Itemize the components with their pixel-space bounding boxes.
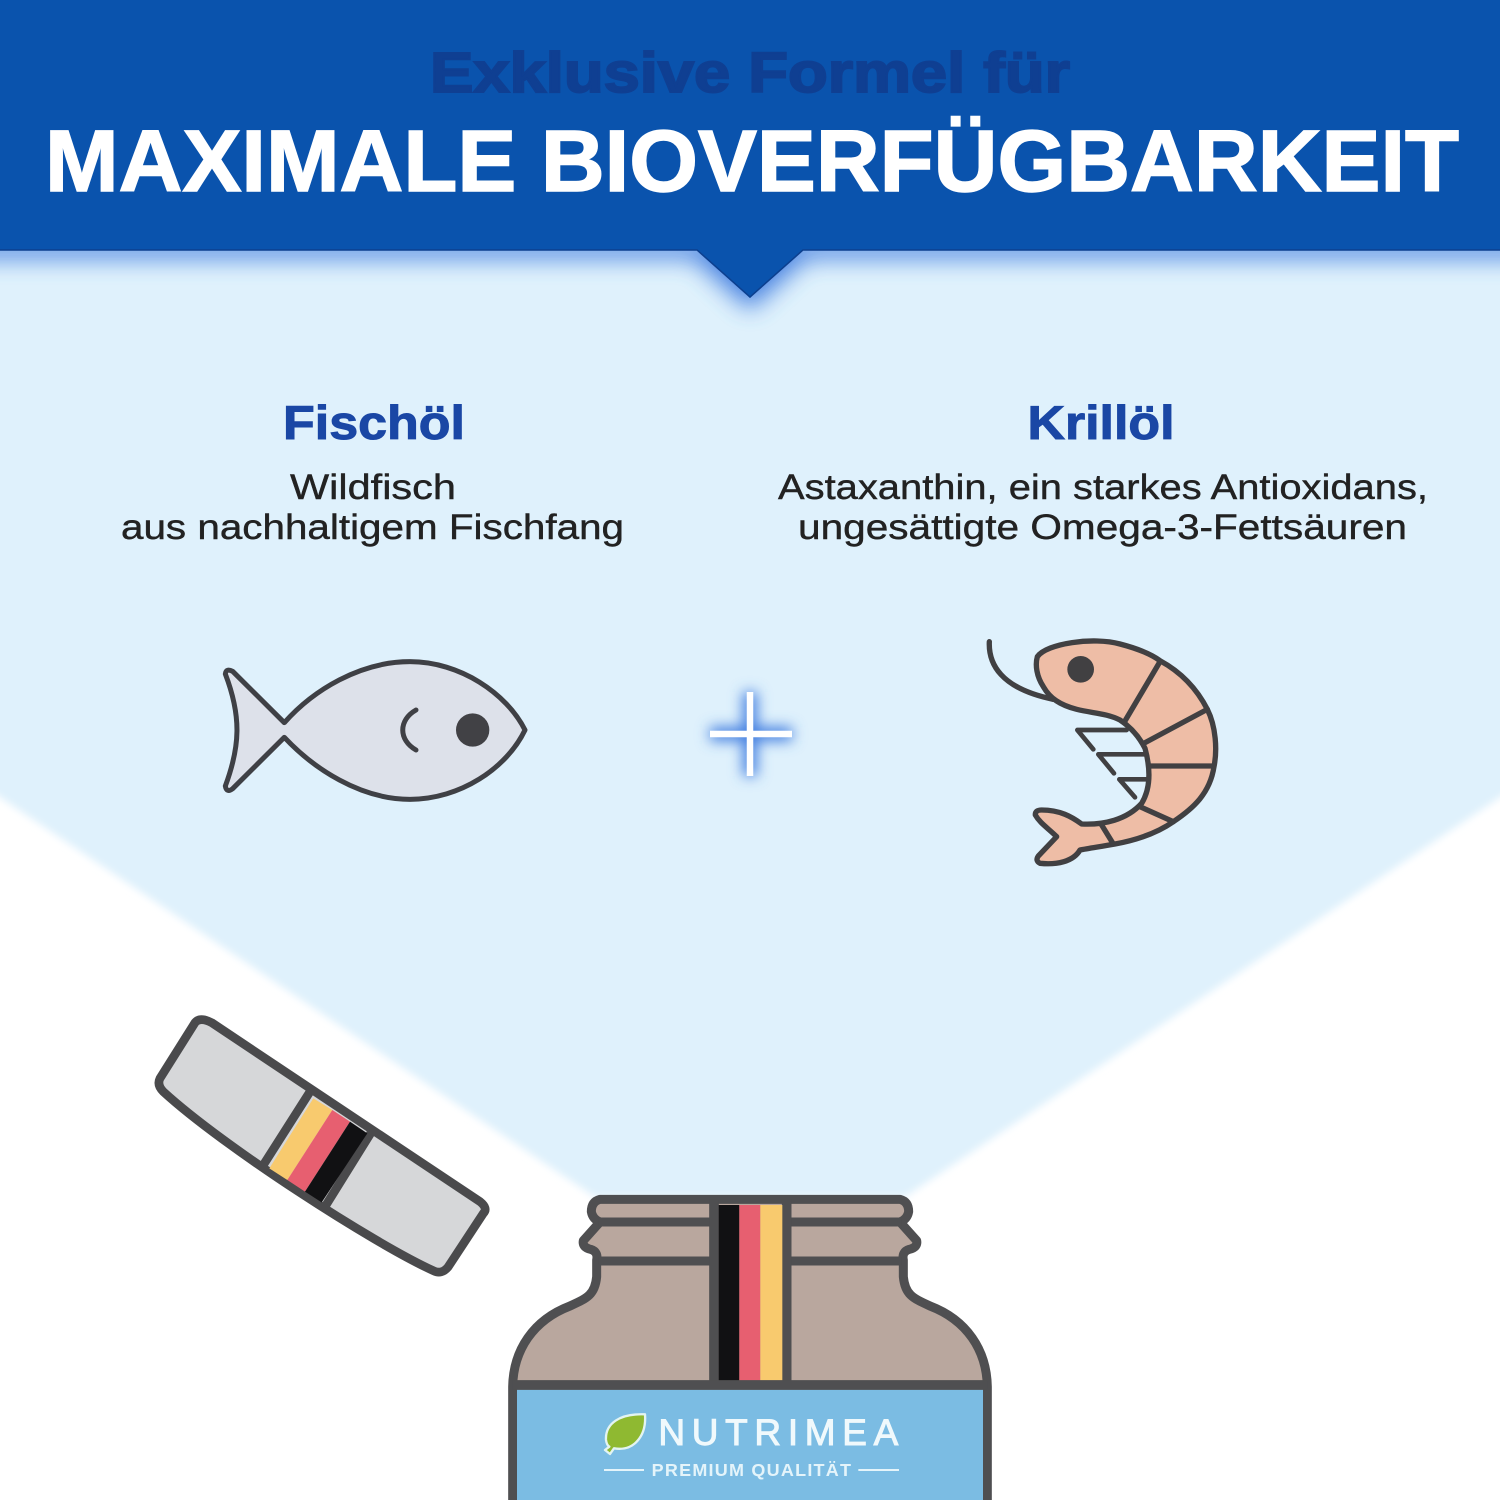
icon: jar lid <box>159 1020 485 1272</box>
flag stripes <box>719 1205 782 1381</box>
light blue light-cone background <box>0 240 1500 1197</box>
heading: Fischöl: Fischöl <box>283 396 465 449</box>
icon: shrimp <box>989 641 1216 864</box>
logo: NUTRIMEA: NUTRIMEA <box>658 1412 899 1453</box>
text: Astaxanthin: Astaxanthin, ein starkes Antioxidans, <box>778 468 1428 507</box>
heading: Krillöl: Krillöl <box>1028 396 1174 449</box>
text: ungesättigte Omega-3-Fettsäuren: ungesättigte Omega-3-Fettsäuren <box>798 508 1407 547</box>
icon: fish <box>225 662 525 799</box>
tagline: PREMIUM QUALITÄT: PREMIUM QUALITÄT <box>652 1460 851 1480</box>
text: Wildfisch: Wildfisch <box>290 468 456 507</box>
jar label <box>517 1390 983 1500</box>
icon: leaf logo <box>605 1414 645 1454</box>
jar shoulder and neck <box>513 1199 987 1500</box>
icon: plus <box>710 692 792 776</box>
title line 2: MAXIMALE BIOVERFÜGBARKEIT <box>45 113 1459 210</box>
panel: Fischöl text <box>121 396 624 547</box>
text: aus nachhaltigem Fischfang: aus nachhaltigem Fischfang <box>121 508 624 547</box>
jar <box>513 1199 987 1500</box>
panel: Krillöl text <box>778 396 1428 547</box>
title line 1: Exklusive Formel für <box>430 41 1070 105</box>
header banner <box>0 0 1500 310</box>
